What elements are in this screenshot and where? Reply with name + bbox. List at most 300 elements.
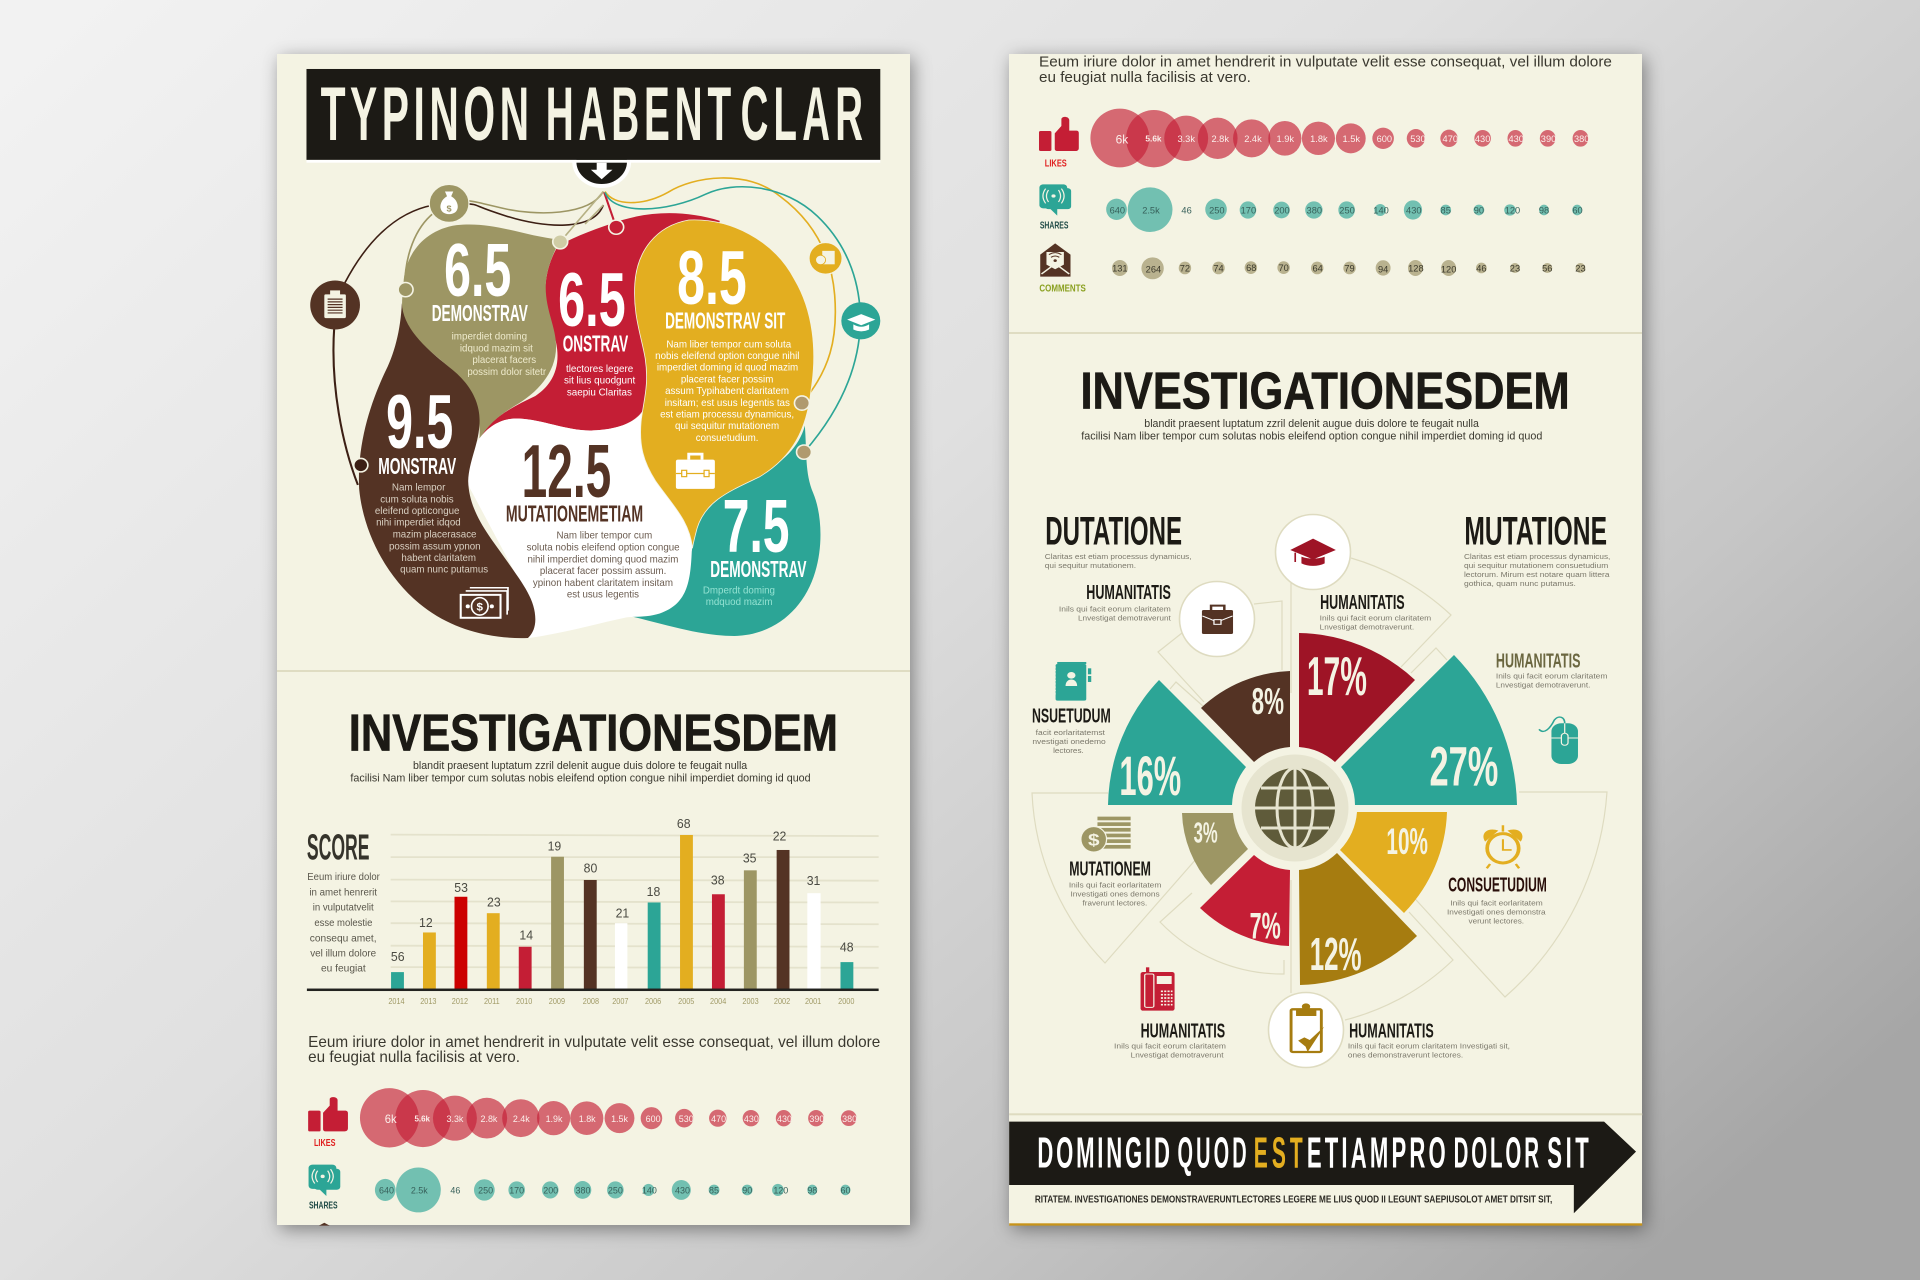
bubbles: likes row: 380	[1574, 134, 1589, 144]
footer and lower labels: HUMANITATIS	[1141, 1019, 1225, 1042]
yellow block text: placerat facer possim	[681, 375, 773, 385]
bar chart: 48	[840, 939, 854, 955]
bar chart: 19	[548, 838, 561, 854]
footer arrow banner: QUOD	[1177, 1129, 1247, 1178]
bubbles: likes row: 530	[1410, 134, 1426, 144]
label: consuetudium: Inils qui facit eorlaritatem	[1450, 899, 1543, 907]
label: humanitatis lower left	[1114, 1019, 1226, 1059]
bubbles: comments row: 68	[1246, 263, 1256, 273]
bubbles: likes row: 430	[1475, 134, 1490, 144]
bubbles: likes row: 5.6k	[1145, 133, 1162, 143]
icon: comments envelope	[1039, 243, 1086, 294]
pie percentages: 10%	[1386, 820, 1428, 862]
subheading: facilisi Nam liber tempor cum solutas nobis eleifend option congue nihil imperdiet doming id quod	[1081, 430, 1542, 442]
brown block text: Nam lempor	[392, 483, 446, 493]
teal block text	[703, 485, 807, 608]
bubbles: shares row: 170	[1241, 206, 1256, 216]
teal block text: DEMONSTRAV	[710, 557, 807, 582]
label: nsuetudum	[1032, 704, 1111, 755]
label: mutationem: Inils qui facit eorlaritatem	[1069, 881, 1161, 889]
yellow block text: qui sequitur mutationem	[675, 421, 779, 432]
blob: white	[468, 408, 692, 638]
label: humanitatis lower left: Inils qui facit eorum claritatem	[1114, 1042, 1226, 1050]
pie percentages: 16%	[1119, 745, 1181, 807]
footer arrow banner: DOMINGID	[1037, 1130, 1170, 1177]
red block text: 6.5	[558, 259, 626, 343]
bubbles: shares row: 46	[450, 1185, 460, 1196]
section divider	[1009, 332, 1642, 334]
title bar: HABENT	[546, 71, 731, 157]
bar chart: 68	[677, 816, 691, 831]
yellow block text: assum Typihabent claritatem	[665, 386, 789, 397]
bubbles: shares row: 250	[1339, 206, 1355, 216]
panel: left poster page	[277, 54, 910, 1226]
subheading: blandit praesent luptatum zzril delenit augue duis dolore te feugait nulla	[413, 759, 747, 772]
bubbles: comments row: 94	[1378, 264, 1388, 274]
bubbles: shares row	[1106, 187, 1583, 232]
yellow block text: est etiam processu dynamicus,	[660, 410, 794, 421]
brown block text: 9.5	[386, 381, 453, 465]
title bar: TYPINON	[321, 72, 529, 156]
label: consuetudium: verunt lectores.	[1469, 917, 1524, 925]
olive block text: 6.5	[444, 229, 511, 313]
white block text	[506, 429, 680, 601]
teal block text: 7.5	[723, 485, 789, 569]
subheading	[1081, 417, 1542, 442]
bubbles: comments row: 72	[1180, 264, 1190, 274]
score description: esse molestie	[314, 918, 372, 929]
icon: shares: SHARES	[1040, 220, 1069, 231]
bubbles: likes row: 530	[679, 1114, 694, 1124]
bubbles: comments row: 23	[1575, 264, 1586, 274]
bubbles: comments row: 46	[1476, 264, 1487, 274]
slice: 17% dark red	[1299, 633, 1415, 762]
olive block text: imperdiet doming	[452, 332, 527, 342]
brown block text: mazim placerasace	[393, 530, 477, 540]
icon: shares	[1039, 184, 1072, 231]
olive block text	[432, 229, 547, 378]
bubbles: shares row: 140	[642, 1185, 657, 1196]
title bar	[306, 69, 880, 163]
label: nsuetudum: nvestigati onedemo	[1032, 738, 1106, 746]
panel: right poster page	[1009, 53, 1642, 1226]
label: humanitatis upper left	[1059, 580, 1172, 622]
bar chart: 2012	[452, 997, 468, 1006]
brown block text: eleifend opticongue	[375, 506, 460, 517]
bubbles: shares row: 2.5k	[411, 1185, 428, 1196]
label: consuetudium: Investigati ones demonstra	[1447, 908, 1546, 916]
label: humanitatis right	[1496, 649, 1608, 689]
bubbles: likes row: 600	[646, 1114, 661, 1124]
right page labels and icons (upper): MUTATIONE	[1464, 508, 1607, 553]
text: mutatione body: gothica, quam nunc putamus.	[1464, 580, 1576, 588]
right page labels and icons (upper): CONSUETUDIUM	[1448, 873, 1547, 896]
bar chart: 35	[743, 850, 757, 866]
bubbles: shares row: 98	[1539, 206, 1549, 216]
bar chart: 22	[773, 828, 786, 843]
label: mutationem: fraverunt lectores.	[1083, 899, 1147, 907]
bar chart: 2007	[612, 997, 628, 1006]
bar chart: 2001	[805, 997, 821, 1006]
bar chart: 21	[616, 905, 629, 921]
yellow block text: DEMONSTRAV SIT	[665, 308, 786, 334]
bubbles: likes row: 380	[842, 1114, 857, 1124]
pie percentages: 3%	[1194, 817, 1218, 849]
icon: comments envelope: COMMENTS	[1039, 284, 1086, 294]
bar chart: 2004	[710, 997, 726, 1006]
yellow block text: 8.5	[677, 237, 747, 320]
score description: consequ amet,	[310, 933, 377, 944]
label: mutationem: MUTATIONEM	[1069, 857, 1151, 880]
right page labels and icons (upper): HUMANITATIS	[1086, 580, 1171, 603]
slice: 27% teal	[1341, 655, 1517, 805]
yellow block text: nobis eleifend option congue nihil	[655, 351, 799, 362]
bar chart: 14	[519, 927, 533, 943]
text: mutatione body: qui sequitur mutationem consuetudium	[1464, 562, 1608, 570]
bubbles: shares row: 250	[608, 1185, 623, 1196]
bubbles: shares row: 140	[1373, 206, 1389, 216]
bubbles: shares row	[375, 1167, 850, 1212]
text: dutatione body: Claritas est etiam processus dynamicus,	[1045, 553, 1192, 561]
right page labels and icons (upper): 27%	[1430, 736, 1498, 798]
icon: graduation cap	[1290, 539, 1336, 566]
icon: coin stack	[1081, 817, 1131, 852]
icon: shares	[309, 1165, 341, 1211]
footer and lower labels	[1009, 967, 1642, 1226]
bar chart: 2011	[484, 997, 500, 1006]
label: humanitatis lower left: Lnvestigat demotraverunt	[1131, 1051, 1224, 1059]
red block text: ONSTRAV	[563, 331, 628, 356]
bubbles: likes row: 390	[809, 1114, 824, 1124]
paragraph: eu feugiat nulla facilisis at vero.	[308, 1048, 520, 1066]
bubbles: shares row: 430	[675, 1185, 690, 1196]
white block text: nihil imperdiet doming quod mazim	[527, 555, 678, 565]
red block text: tlectores legere	[566, 364, 634, 375]
bubbles: likes row: 470	[1443, 134, 1458, 144]
label: mutationem: Investigati ones demons	[1071, 890, 1160, 898]
blob diagram section	[306, 69, 880, 638]
bubbles: likes row: 2.8k	[1211, 134, 1229, 144]
yellow block text: imperdiet doming id quod mazim	[657, 363, 798, 374]
icon: shares: SHARES	[309, 1200, 338, 1211]
bubbles: likes row: 5.6k	[414, 1114, 430, 1123]
bubbles: shares row: 90	[742, 1185, 752, 1196]
icon: likes: LIKES	[1045, 158, 1067, 169]
bar chart: 2008	[583, 997, 599, 1006]
bubbles: likes row: 470	[711, 1114, 726, 1124]
label: mutationem	[1069, 857, 1161, 907]
blob: teal	[631, 426, 820, 636]
bubbles: likes row: 1.9k	[1277, 134, 1294, 144]
white block text: ypinon habent claritatem insitam	[533, 578, 673, 589]
bubbles: comments row: 128	[1408, 264, 1424, 274]
bar chart: 2006	[645, 997, 661, 1006]
icon: address book	[1055, 662, 1091, 701]
bubbles: shares row: 430	[1406, 206, 1422, 216]
bubbles: shares row: 380	[576, 1185, 590, 1196]
section divider	[277, 670, 910, 672]
blob: olive	[402, 224, 560, 439]
paragraph	[308, 1033, 880, 1066]
icon: globe	[1242, 754, 1348, 862]
bubbles: shares row: 200	[543, 1185, 558, 1196]
brown block text	[375, 381, 488, 576]
pie percentages: 8%	[1252, 680, 1284, 722]
icon: briefcase	[1202, 606, 1233, 634]
blob: red	[479, 213, 720, 439]
bubbles: shares row: 170	[509, 1185, 524, 1196]
bubbles: likes row: 1.8k	[1310, 134, 1328, 144]
slice: 10% yellow	[1340, 812, 1447, 913]
white block text: placerat facer possim assum.	[540, 566, 666, 577]
bubbles: shares row: 200	[1274, 206, 1290, 216]
heading: investigationesdem: INVESTIGATIONESDEM	[349, 703, 838, 761]
heading: investigationesdem: INVESTIGATIONESDEM	[1080, 362, 1570, 420]
bubbles: comments row	[1112, 257, 1586, 279]
pie percentages: 7%	[1250, 905, 1281, 946]
score description: vel illum dolore	[310, 948, 376, 960]
icon: banknotes	[461, 588, 508, 618]
bubbles: shares row: 90	[1474, 206, 1484, 216]
bubbles: comments row: 264	[1146, 264, 1161, 274]
label: humanitatis upper left: Lnvestigat demotraverunt	[1078, 614, 1172, 622]
bubbles: shares row: 85	[1441, 206, 1451, 216]
olive block text: idquod mazim sit	[460, 343, 533, 354]
icon: graduation cap node	[841, 302, 880, 339]
bubbles: likes row: 2.8k	[480, 1114, 498, 1124]
bubbles: shares row: 120	[773, 1185, 788, 1196]
brown block text: cum soluta nobis	[380, 495, 454, 505]
yellow block text: insitam; est usus legentis tas	[665, 398, 790, 409]
score description: in vulputatvelit	[313, 902, 374, 913]
icon: coins node	[809, 243, 842, 274]
bubbles: shares row: 120	[1505, 206, 1520, 216]
white block text: est usus legentis	[567, 590, 639, 601]
label: humanitatis right: HUMANITATIS	[1496, 649, 1580, 672]
bubbles: shares row: 85	[709, 1185, 719, 1196]
footer arrow banner: ETIAMPRO	[1307, 1130, 1446, 1177]
teal block text: Dmperdt doming	[703, 585, 775, 596]
score description: eu feugiat	[321, 963, 367, 975]
bar chart: 18	[647, 884, 660, 899]
bar chart: 2002	[774, 997, 790, 1006]
bar chart: 2005	[678, 997, 694, 1006]
bubbles: shares row: 250	[478, 1185, 493, 1196]
bubbles: likes row: 1.8k	[579, 1114, 596, 1124]
paragraph: Eeum iriure dolor in amet hendrerit in vulputate velit esse consequat, vel illum dolore	[308, 1033, 880, 1051]
subheading	[350, 759, 811, 784]
icon: alarm clock	[1483, 825, 1522, 868]
icon: clipboard node	[310, 281, 360, 330]
icon circles	[1180, 514, 1350, 1068]
bubbles: likes row: 430	[1508, 134, 1524, 144]
bubbles: likes row: 1.5k	[611, 1114, 628, 1124]
blob: yellow	[635, 220, 814, 548]
bubbles section	[1039, 53, 1612, 442]
bar chart: 2003	[742, 997, 759, 1006]
white block text: Nam liber tempor cum	[556, 531, 652, 542]
bubbles: shares row: 380	[1307, 206, 1322, 216]
olive block text: placerat facers	[472, 355, 536, 366]
yellow block text: consuetudium.	[696, 433, 758, 444]
white block text: 12.5	[522, 429, 611, 513]
olive block text: possim dolor sitetr	[467, 367, 547, 378]
bubbles: comments row: 74	[1213, 264, 1224, 274]
label: humanitatis lower right: HUMANITATIS	[1349, 1019, 1434, 1042]
bubbles: comments row: 131	[1112, 264, 1128, 274]
icon: banknotes: $	[477, 601, 484, 613]
bar chart: 56	[391, 949, 405, 964]
bubbles: shares row: 60	[840, 1185, 850, 1196]
yellow block text	[655, 237, 799, 444]
bubbles: likes row: 2.4k	[513, 1114, 530, 1124]
label: consuetudium	[1447, 873, 1547, 925]
icon: likes	[1039, 117, 1079, 169]
bar chart: 2013	[420, 997, 436, 1006]
label: humanitatis upper left: Inils qui facit eorum claritatem	[1059, 605, 1171, 613]
slice: 7% crimson	[1200, 855, 1290, 946]
title bar: CLAR	[741, 71, 863, 157]
right page labels and icons (upper): DUTATIONE	[1045, 508, 1182, 553]
icon: money bag node: $	[447, 204, 452, 213]
teal block text: mdquod mazim	[706, 597, 772, 608]
connector nodes	[354, 220, 811, 472]
bubbles: likes row: 430	[777, 1114, 792, 1124]
score and bubbles section: SCORE	[307, 827, 370, 868]
bubbles: shares row: 640	[379, 1185, 394, 1196]
bubbles: likes row: 3.3k	[1177, 134, 1195, 144]
paragraph: eu feugiat nulla facilisis at vero.	[1039, 69, 1251, 86]
pie percentages	[1119, 646, 1498, 981]
right page labels and icons (upper)	[1032, 508, 1610, 981]
text: dutatione body: qui sequitur mutationem.	[1045, 562, 1136, 570]
slice: 12% gold	[1299, 853, 1417, 985]
red block text: saepiu Claritas	[567, 388, 632, 399]
bar chart	[307, 816, 879, 1006]
subheading: facilisi Nam liber tempor cum solutas nobis eleifend option congue nihil imperdiet doming id quod	[350, 771, 811, 784]
footer arrow banner: DOLOR	[1454, 1129, 1539, 1178]
pie chart	[1108, 633, 1517, 985]
slice: 16% teal	[1108, 680, 1246, 805]
icon: clipboard check	[1291, 1003, 1324, 1052]
bubbles: comments row: 64	[1312, 264, 1323, 274]
white block text: soluta nobis eleifend option congue	[527, 543, 680, 554]
bubbles: shares row: 2.5k	[1142, 206, 1160, 216]
bar chart: 2000	[838, 997, 854, 1006]
icon: coin stack: $	[1088, 830, 1100, 849]
icon: comments (cropped tip)	[319, 1223, 330, 1226]
brown block text: MONSTRAV	[378, 454, 456, 479]
subheading: blandit praesent luptatum zzril delenit augue duis dolore te feugait nulla	[1144, 417, 1479, 430]
red block text: sit lius quodgunt	[564, 376, 635, 387]
bubbles: shares row: 640	[1110, 206, 1125, 216]
bar chart: 2009	[549, 997, 565, 1006]
bubbles: likes row: 2.4k	[1244, 134, 1262, 144]
label: humanitatis upper centre	[1320, 590, 1431, 631]
bubbles: likes row: 600	[1377, 134, 1392, 144]
brown block text: habent claritatem	[401, 553, 476, 564]
slice: 8% brown	[1201, 671, 1290, 762]
text: mutatione body: Claritas est etiam processus dynamicus,	[1464, 553, 1610, 561]
slice: 3% olive	[1182, 813, 1248, 885]
bubbles: likes row: 3.3k	[446, 1114, 464, 1124]
bubbles: likes row: 1.9k	[546, 1114, 563, 1124]
yellow block text: Nam liber tempor cum soluta	[666, 340, 792, 350]
footer arrow banner	[1009, 1122, 1636, 1213]
bar chart: 2010	[516, 997, 532, 1006]
label: humanitatis upper centre: HUMANITATIS	[1320, 590, 1405, 613]
score description: in amet henrerit	[309, 887, 378, 898]
right page labels and icons (upper): NSUETUDUM	[1032, 704, 1111, 727]
score and bubbles section	[307, 703, 880, 1226]
icon: likes	[308, 1097, 348, 1149]
bar chart: 53	[454, 880, 468, 895]
label: nsuetudum: lectores.	[1053, 747, 1084, 755]
bar chart: 38	[711, 872, 725, 887]
bubbles: likes row: 6k	[1116, 132, 1128, 146]
footer arrow banner: SIT	[1547, 1130, 1589, 1177]
label: humanitatis lower right: ones demonstraverunt lectores.	[1348, 1051, 1463, 1059]
label: humanitatis lower right	[1348, 1019, 1510, 1059]
text: mutatione body: lectorum. Mirum est notare quam littera	[1464, 571, 1610, 579]
central hub with arrow	[574, 137, 629, 186]
blob: brown	[359, 303, 535, 638]
outline connector shapes	[1032, 558, 1607, 1020]
bar chart: 23	[487, 894, 501, 910]
footer arrow banner: EST	[1254, 1129, 1303, 1177]
bubbles: likes row	[1090, 109, 1589, 167]
bubbles: comments row: 79	[1344, 264, 1355, 274]
icon: telephone	[1141, 967, 1175, 1011]
label: humanitatis right: Inils qui facit eorum claritatem	[1496, 672, 1608, 680]
label: humanitatis right: Lnvestigat demotraverunt.	[1496, 681, 1590, 689]
bubbles: likes row: 6k	[385, 1112, 397, 1126]
bar chart: 2014	[388, 997, 405, 1006]
connector lines	[333, 178, 860, 485]
label: humanitatis lower right: Inils qui facit eorum claritatem Investigati sit,	[1348, 1042, 1510, 1050]
pie percentages: 12%	[1310, 928, 1362, 981]
bar chart: 80	[584, 860, 597, 876]
bubbles: comments row: 23	[1510, 264, 1520, 274]
paragraph	[1039, 53, 1612, 86]
pie percentages: 17%	[1307, 646, 1367, 707]
bubbles: shares row: 46	[1181, 206, 1192, 216]
bubbles: shares row: 60	[1572, 206, 1583, 216]
icon: mouse	[1539, 717, 1578, 764]
bar chart: 12	[419, 915, 433, 930]
brown block text: possim assum ypnon	[389, 542, 481, 552]
score description: Eeum iriure dolor	[307, 872, 380, 883]
text: mutatione body	[1464, 553, 1610, 588]
icon: likes: LIKES	[314, 1138, 336, 1149]
label: nsuetudum: facit eorlaritatemst	[1036, 729, 1106, 737]
bubbles: shares row: 98	[807, 1185, 817, 1196]
bubbles: comments row: 120	[1441, 264, 1456, 274]
icon: money bag node	[429, 184, 469, 222]
bubbles: comments row: 56	[1542, 264, 1552, 274]
label: humanitatis upper centre: Inils qui facit eorum claritatem	[1320, 614, 1431, 622]
bubbles: likes row: 1.5k	[1342, 134, 1360, 144]
score description	[307, 872, 380, 975]
bubbles: likes row	[360, 1088, 857, 1147]
footer tagline: RITATEM. INVESTIGATIONES DEMONSTRAVERUNTLECTORES LEGERE ME LIUS QUOD II LEGUNT SAEPIUSOLOT AMET DITSIT SIT,	[1035, 1195, 1552, 1205]
white block text: MUTATIONEMETIAM	[506, 501, 643, 527]
bar chart: 31	[807, 873, 820, 888]
red block text	[558, 259, 635, 399]
label: humanitatis upper centre: Lnvestigat demotraverunt.	[1320, 623, 1414, 631]
brown block text: nihi imperdiet idqod	[376, 518, 461, 529]
brown block text: quam nunc putamus	[400, 565, 488, 576]
